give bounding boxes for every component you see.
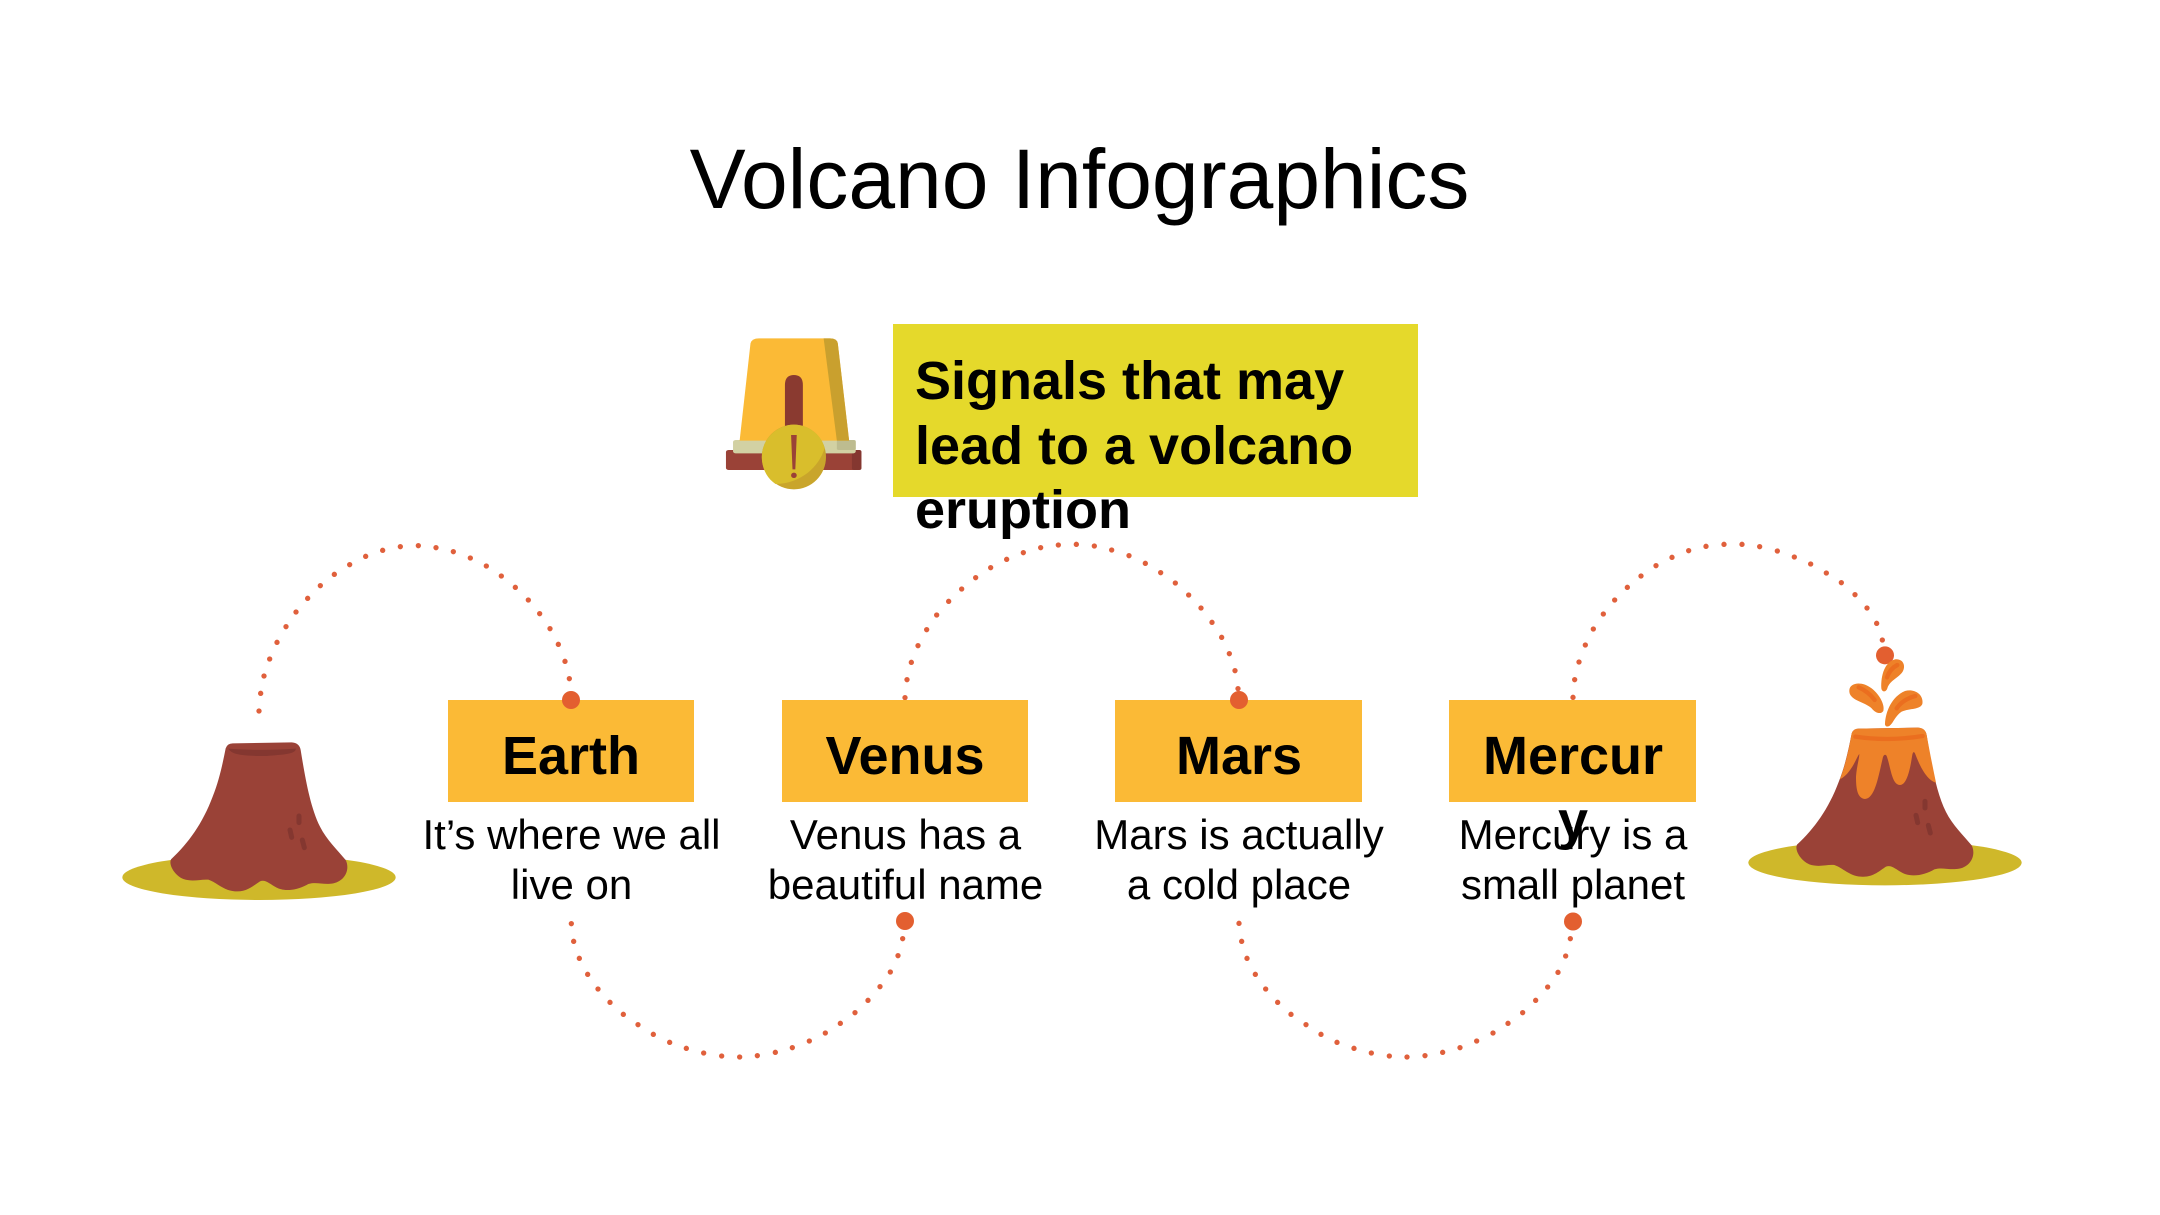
panel: Venus: beautiful name bbox=[768, 861, 1043, 908]
panel: Earth: Earth bbox=[502, 726, 640, 786]
panel: Venus bbox=[768, 700, 1043, 908]
panel: Mars: a cold place bbox=[1127, 861, 1351, 908]
panel: Mars bbox=[1094, 700, 1384, 908]
title: Volcano Infographics bbox=[690, 132, 1469, 226]
dotted path connecting the planets bbox=[259, 544, 1882, 1057]
panel: Venus: Venus bbox=[825, 726, 985, 786]
icon: alarm siren bbox=[726, 338, 861, 489]
callout box bbox=[893, 324, 1418, 497]
callout heading: Signals that may bbox=[915, 351, 1344, 411]
panel: Venus: Venus has a bbox=[790, 811, 1022, 858]
panel: Mercury: small planet bbox=[1461, 861, 1685, 908]
callout heading: eruption bbox=[915, 480, 1131, 540]
panel: Earth: live on bbox=[511, 861, 632, 908]
icon: erupting volcano bbox=[1748, 646, 2022, 885]
panel: Mercury bbox=[1449, 700, 1696, 908]
panel: Mars: Mars is actually bbox=[1094, 811, 1384, 858]
icon: dormant volcano bbox=[122, 742, 396, 900]
panel: Mercury: y bbox=[1558, 791, 1588, 851]
panel: Mercury: Mercury is a bbox=[1459, 811, 1688, 858]
callout heading: lead to a volcano bbox=[915, 416, 1353, 476]
panel: Mercury: Mercur bbox=[1483, 726, 1663, 786]
panel: Earth: It’s where we all bbox=[422, 811, 721, 858]
panel: Earth bbox=[422, 700, 721, 908]
panel: Mars: Mars bbox=[1176, 726, 1302, 786]
path marker dots bbox=[562, 691, 1582, 930]
